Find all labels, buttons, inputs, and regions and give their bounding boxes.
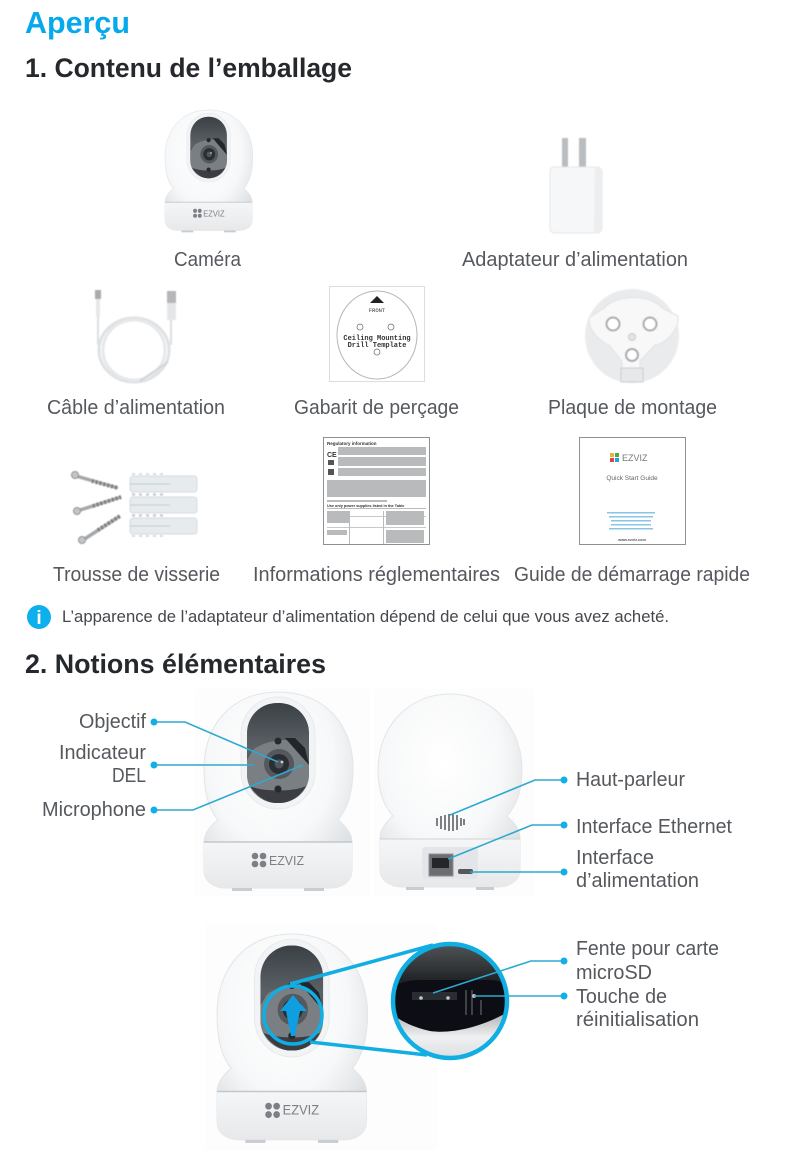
icon: info	[27, 605, 51, 629]
icon: mounting plate	[585, 289, 679, 383]
note text: L’apparence de l’adaptateur d’alimentation dépend de celui que vous avez acheté.	[62, 608, 669, 626]
title: Aperçu: Aperçu	[25, 5, 130, 40]
photo: camera back	[374, 689, 534, 897]
icon: regulatory document: Use only power supplies listed in the Table	[327, 504, 404, 508]
panel: screw kit item	[53, 472, 220, 586]
photo: camera front: EZVIZ	[269, 853, 304, 868]
panel: mounting plate item	[548, 289, 717, 419]
callout: Objectif	[79, 711, 278, 762]
callout: Fente pour carte microSD: microSD	[576, 962, 652, 984]
photo: camera front with zoom target	[205, 925, 437, 1150]
callout: adapter note	[27, 605, 669, 629]
icon: drill template	[330, 286, 424, 382]
panel: power adapter item	[462, 138, 688, 271]
photo: camera front with zoom target: EZVIZ	[283, 1102, 319, 1118]
zoomed inset	[390, 940, 510, 1062]
callout: Indicateur DEL	[59, 742, 254, 787]
panel: drill template item	[294, 286, 459, 419]
label: Adaptateur: Adaptateur d’alimentation	[462, 249, 688, 271]
heading: section 2: 2. Notions élémentaires	[25, 649, 326, 679]
icon: drill template: FRONT	[369, 307, 386, 314]
callout: Haut-parleur	[450, 769, 685, 815]
callout: Fente pour carte microSD: Fente pour carte	[576, 938, 719, 960]
arrow: up	[280, 995, 307, 1036]
callout: Objectif: Objectif	[79, 711, 146, 733]
zoom lines and target circle	[264, 945, 433, 1055]
panel: regulatory info item	[253, 438, 500, 586]
label: Câble: Câble d’alimentation	[47, 397, 225, 419]
diagram: microSD and reset detail	[205, 925, 719, 1150]
label: Informations: Informations réglementaires	[253, 564, 500, 586]
icon: screws and anchors	[72, 472, 197, 544]
label: Guide: Guide de démarrage rapide	[514, 564, 750, 586]
callout: Indicateur DEL: Indicateur	[59, 742, 146, 764]
callout: Haut-parleur: Haut-parleur	[576, 769, 685, 791]
callout: Microphone	[42, 765, 303, 821]
icon: drill template: Ceiling Mounting	[343, 335, 411, 343]
callout: Interface Ethernet	[448, 816, 732, 859]
icon: regulatory document	[324, 438, 430, 544]
label: Trousse: Trousse de visserie	[53, 564, 220, 586]
callout: Interface d'alimentation: Interface	[576, 847, 654, 869]
panel: quick start guide item	[514, 438, 750, 586]
icon: small camera photo: EZVIZ	[203, 209, 225, 218]
icon: drill template: Drill Template	[348, 342, 406, 350]
callout: Touche de réinitialisation: Touche de	[576, 986, 667, 1008]
icon: quick start booklet: www.ezviz.com	[617, 538, 646, 542]
heading: section 1: 1. Contenu de l’emballage	[25, 53, 352, 83]
label: Gabarit: Gabarit de perçage	[294, 397, 459, 419]
callout: Interface d'alimentation	[470, 847, 699, 892]
icon: info: i	[36, 608, 42, 629]
icon: quick start booklet	[580, 438, 686, 544]
panel: power cable item	[47, 290, 225, 419]
icon: power adapter	[550, 138, 602, 233]
callout: Interface d'alimentation: d’alimentation	[576, 870, 699, 892]
icon: cable coil	[95, 290, 176, 382]
icon: regulatory document: Regulatory information	[327, 441, 377, 446]
icon: quick start booklet: EZVIZ	[622, 453, 648, 463]
icon: quick start booklet: Quick Start Guide	[606, 475, 658, 482]
icon: small camera photo	[165, 110, 253, 232]
icon: regulatory document: CE	[327, 452, 337, 459]
photo: camera front	[195, 689, 370, 897]
label: Caméra: Caméra	[174, 249, 242, 271]
diagram: back view	[374, 689, 732, 897]
callout: Interface Ethernet: Interface Ethernet	[576, 816, 732, 838]
callout: Touche de réinitialisation	[474, 986, 699, 1031]
callout: Indicateur DEL: DEL	[112, 765, 146, 787]
callout: Fente pour carte microSD	[433, 938, 719, 993]
callout: Touche de réinitialisation: réinitialisation	[576, 1009, 699, 1031]
callout: Microphone: Microphone	[42, 799, 146, 821]
diagram: front view	[42, 689, 370, 897]
panel: camera item	[165, 110, 253, 271]
label: Plaque: Plaque de montage	[548, 397, 717, 419]
